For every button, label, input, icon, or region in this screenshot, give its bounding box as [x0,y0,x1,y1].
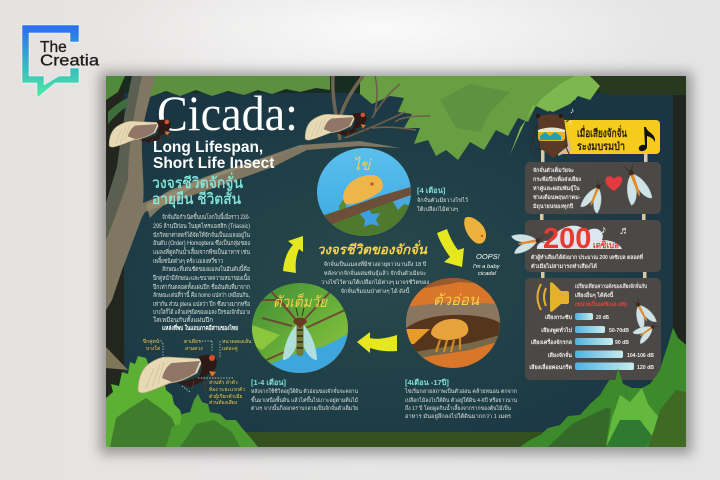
cycle heading: วงจรชีวิตของจักจั่น [317,240,428,257]
body text: 295 ล้านปีก่อน ในยุคไทรแอสสิก (Triassic) [153,222,250,230]
anatomy cicada: ตัวผู้เรียกตัวเมีย [209,393,242,400]
egg caption: [4 เดือน] [417,186,446,195]
bar chart: loudness: 120 dB [637,365,654,371]
nymph caption: อาหาร มันอยู่ลึกลงไปใต้ดินมากกว่า 1 เมตร [405,413,511,420]
adult stage circle: ตัวเต็มวัย [273,293,328,311]
drummer cicada icon: ♬ [567,118,575,127]
logo: The Creatia [22,25,99,98]
baby cicada egg and OOPS note: cicada! [478,271,497,277]
anatomy cicada: หนวดสองเส้น [222,338,252,345]
adult caption [251,378,358,412]
infographic poster [106,76,686,447]
bar chart: loudness: เสียงเครื่องจักรกล [531,338,572,346]
nymph caption: เปลือกไม้ลงไปใต้ดิน ตัวอยู่ใต้ดิน 4-6ปี หรือยาวนาน [405,397,517,404]
body text: ลักษณะที่เด่นชัดของแมลงในอันดับนี้คือ [162,264,250,273]
tree trunk and branches [106,76,430,370]
branch cicada left [109,120,173,147]
egg caption: จักจั่นตัวเมียวางไข่ไว้ [417,196,468,204]
sign posts [540,150,648,281]
drummer cicada icon [530,106,576,158]
body text: แมลงที่ดูดกินน้ำเลี้ยงจากพืชเป็นอาหาร เช่น [153,247,251,256]
adult caption: หลังจากใช้ชีวิตอยู่ใต้ดิน ตัวอ่อนของจักจั่นจะคลาน [251,387,358,395]
logo: The Creatia: Creatia [40,52,99,70]
title: Cicada: [157,85,298,141]
top leaf canopy [148,76,686,160]
egg stage circle [317,148,411,236]
baby cicada egg and OOPS note: I'm a baby [473,264,501,270]
panel: 200 decibel: ตัวผู้ทำเสียงได้ดังมาก ประมาณ 200 เดซิเบล ตลอดที่ [531,253,643,262]
cycle heading [317,240,429,295]
cycle heading: จักจั่นเริ่มบนป่าต่างๆ ได้ ดังนี้ [341,287,410,295]
bar chart: loudness: เสียงกระซิบ [545,314,573,321]
body text: ปีกเท่ากันตลอดทั้งแผ่นปีก ชื่ออันดับที่มาจาก [152,282,250,291]
bar chart: loudness: เสียงพูดทั่วไป [541,326,573,335]
bottom-left bush [106,356,190,447]
forest background panel [123,93,673,432]
body text: ลักษณะเด่นที่ว่านี้ คือ homo แปลว่า เหมือนกัน, [153,290,250,299]
body text: ปีกคู่หน้ามีลักษณะและขนาดความหนาของเนื้อ [153,273,250,282]
Thai subtitle: อายุยืน ชีวิตสั้น [152,188,241,209]
nymph caption: [4เดือน -17ปี] [405,378,449,387]
dark tree bark edges [106,76,544,435]
bottom-centre-left bush [166,394,258,447]
bar chart: loudness: เสียงเลื่อยคอนกรีต [529,363,572,371]
cycle heading: หลังจากจักจั่นผสมพันธุ์แล้ว จักจั่นตัวเมียจะ [324,269,426,277]
egg caption [417,186,468,213]
anatomy cicada: ตาเดียว [184,338,201,345]
panel: mating call: หาคู่และผสมพันธุ์ใน [533,184,580,193]
panel: 200 decibel: ♬ [619,225,630,237]
bottom strip foliage [230,432,540,447]
body text: เท่ากัน ส่วน ptera แปลว่า ปีก ซึ่งบางมากหรือ [153,299,250,308]
logo: The Creatia: The [40,39,67,56]
yellow sign heading: ระงมบรมป่า [577,140,625,153]
title: Long Lifespan, [153,139,263,156]
Thai subtitle [152,172,243,209]
yellow sign heading [560,120,660,154]
nymph caption [404,378,517,420]
arrow: egg to nymph [437,229,464,267]
cycle heading: วางไข่ไว้ตามใต้เปลือกไม้ต่างๆ มาจรชีวิตของ [321,279,429,286]
yellow sign heading: เมื่อเสียงจักจั่น [577,125,627,140]
title [154,96,294,168]
comparison intro text: (หน่วยเป็นเดซิเบล dB) [575,300,627,308]
egg stage circle: ไข่ [353,156,372,174]
panel: mating call: จักจั่นตัวเต็มวัยจะ [533,166,574,174]
body text: บางใสก็ได้ แล้วแต่ชนิดของแมลง ปีกของจักจั่นบาง [153,307,250,316]
anatomy cicada: ส่วนท้องเสียง [209,399,238,406]
adult caption: ขึ้นมาเหนือพื้นดิน แล้วไต่ขึ้นไปเกาะอยู่ตามต้นไม้ [251,396,358,404]
panel: mating call [525,161,661,214]
baby cicada egg and OOPS note: OOPS! [476,252,501,261]
panel: sound comparison [525,278,661,380]
body text: จักจั่นถือกำเนิดขึ้นบนโลกใบนี้เมื่อราว 230- [162,212,250,221]
icon: speaker [538,282,569,312]
anatomy cicada: บางใส [146,345,160,352]
adult caption: [1-4 เดือน] [251,378,286,387]
bar chart: loudness: 104-106 dB [627,353,654,359]
baby cicada egg and OOPS note [464,217,501,277]
anatomy cicada [138,338,252,406]
anatomy cicada: ท้อง ระยะแรกตัว [209,386,245,393]
panel: mating call: ช่วงเดือนพฤษภาคม- [533,194,581,201]
anatomy cicada: แต่ละคู่ [222,346,238,352]
adult stage circle [250,281,350,375]
nymph stage circle: ตัวอ่อน [433,292,480,309]
body text: อันดับ (Order) Homoptera ซึ่งเป็นกลุ่มของ [153,238,250,247]
bottom-right bush [520,328,686,447]
comparison intro text: เสียงอื่นๆ ได้ดังนี้ [575,290,614,299]
bar chart: loudness: 20 dB [596,315,609,321]
arrow: nymph to adult [357,332,397,353]
body text: นักวิทยาศาสตร์ได้จัดให้จักจั่นเป็นแมลงอยู่ใน [153,230,251,239]
comparison intro text [575,282,647,308]
comparison intro text: เปรียบเทียบความดังของเสียงจักจั่นกับ [575,282,647,290]
body text: แหล่งที่พบ ในแถบภาคอีสานของไทย [162,323,238,332]
drummer cicada icon: ♪ [570,106,574,115]
anatomy cicada: ส่วนหัว ลำตัว [209,380,238,386]
body text: เพลี้ยชนิดต่างๆ ครั่ง แมลงหวี่ขาว [153,256,223,265]
nymph caption: ไข่เริ่มกลายสภาพเป็นตัวอ่อน คล้ายหนอน ตกจาก [404,387,517,395]
panel: 200 decibel: 200 [543,223,591,255]
body text: ใสเหมือนกันทั้งแผ่นปีก [153,315,213,324]
nymph stage circle [404,276,504,370]
bar chart: loudness: เสียงจักจั่น [548,351,572,359]
panel: mating call: มิถุนายนของทุกปี [533,202,574,210]
bar chart: loudness: 90 dB [615,340,629,346]
Thai subtitle: วงจรชีวิตจักจั่น [152,172,243,192]
anatomy cicada: ปีกคู่หน้า [143,338,162,345]
cycle heading: จักจั่นเป็นแมลงที่มีช่วงอายุยาวนานถึง 18 ปี [324,260,427,268]
nymph caption: ถึง 17 ปี โดยดูดกินน้ำเลี้ยงจากรากของต้นไม้เป็น [404,404,511,412]
panel: mating call: กระพือปีกเพื่อส่งเสียง [533,175,581,183]
bar chart: loudness [529,313,654,371]
body text [152,212,251,332]
title: Short Life Insect [153,155,274,172]
branch cicada right [305,113,369,140]
anatomy cicada: สามดวง [185,346,203,352]
panel: 200 decibel [511,220,661,272]
adult caption: ต่างๆ จากนั้นก็ลอกคราบกลายเป็นจักจั่นตัวเต็มวัย [251,404,358,412]
panel: 200 decibel: ตัวเมียไม่สามารถทำเสียงได้ [531,262,598,270]
bar chart: loudness: 50-70dB [609,328,629,334]
panel: 200 decibel: เดซิเบล [593,240,619,250]
arrow: adult to egg [283,236,303,273]
foreground bushes over comparison panel [606,328,686,447]
egg caption: ใต้เปลือกไม้ต่างๆ [417,206,458,213]
panel: 200 decibel: ♪ [601,224,606,236]
